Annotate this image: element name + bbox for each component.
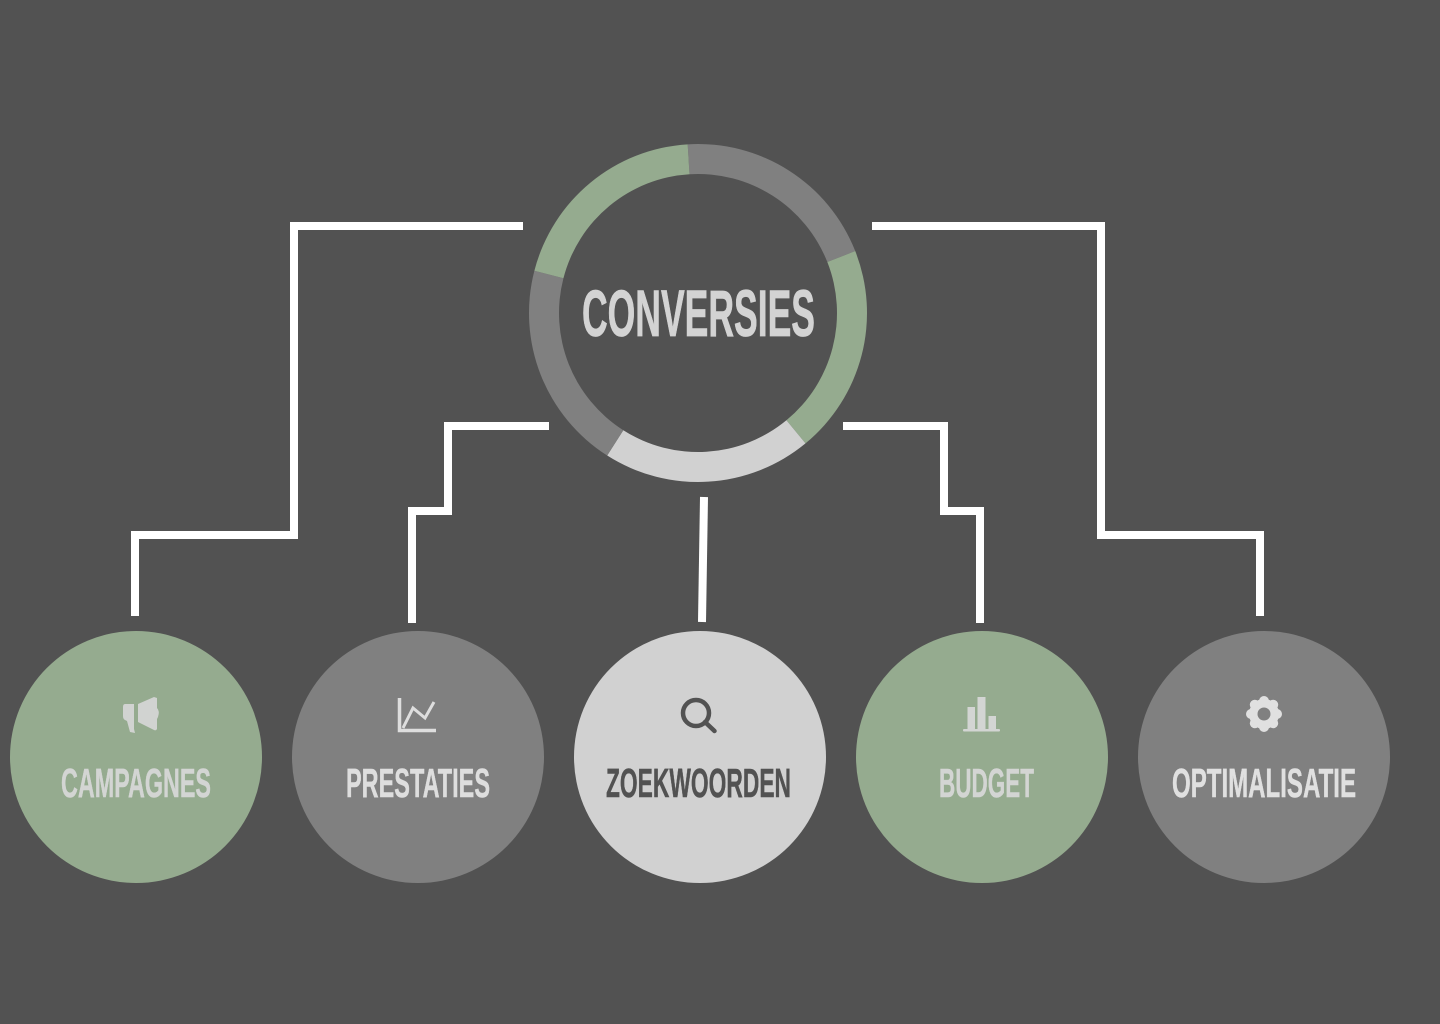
node: budget <box>856 631 1108 883</box>
ring segment: green right <box>786 251 867 443</box>
ring segment: green top left <box>534 144 690 278</box>
node: zoekwoorden <box>574 631 826 883</box>
title: CONVERSIES <box>582 276 815 350</box>
icon: bar chart <box>963 697 1000 732</box>
connector: to budget <box>843 426 980 623</box>
ring segment: gray top right <box>688 144 855 262</box>
node: campagnes <box>10 631 262 883</box>
icon: megaphone <box>123 697 159 733</box>
node: prestaties <box>292 631 544 883</box>
icon: magnifier <box>683 700 714 731</box>
label: PRESTATIES <box>346 760 490 806</box>
ring segment: gray left <box>529 271 623 456</box>
connector: to zoekwoorden <box>702 497 704 622</box>
connector: to optimalisatie <box>872 226 1260 616</box>
icon: line chart <box>400 698 436 730</box>
label: ZOEKWOORDEN <box>606 760 791 806</box>
label: CAMPAGNES <box>61 760 211 806</box>
central ring with title <box>529 144 867 482</box>
label: BUDGET <box>939 760 1034 806</box>
connector: to campagnes <box>135 226 523 616</box>
ring segment: light bottom <box>607 420 806 482</box>
node: optimalisatie <box>1138 631 1390 883</box>
icon: gear <box>1246 696 1282 732</box>
connector: to prestaties <box>412 426 549 623</box>
